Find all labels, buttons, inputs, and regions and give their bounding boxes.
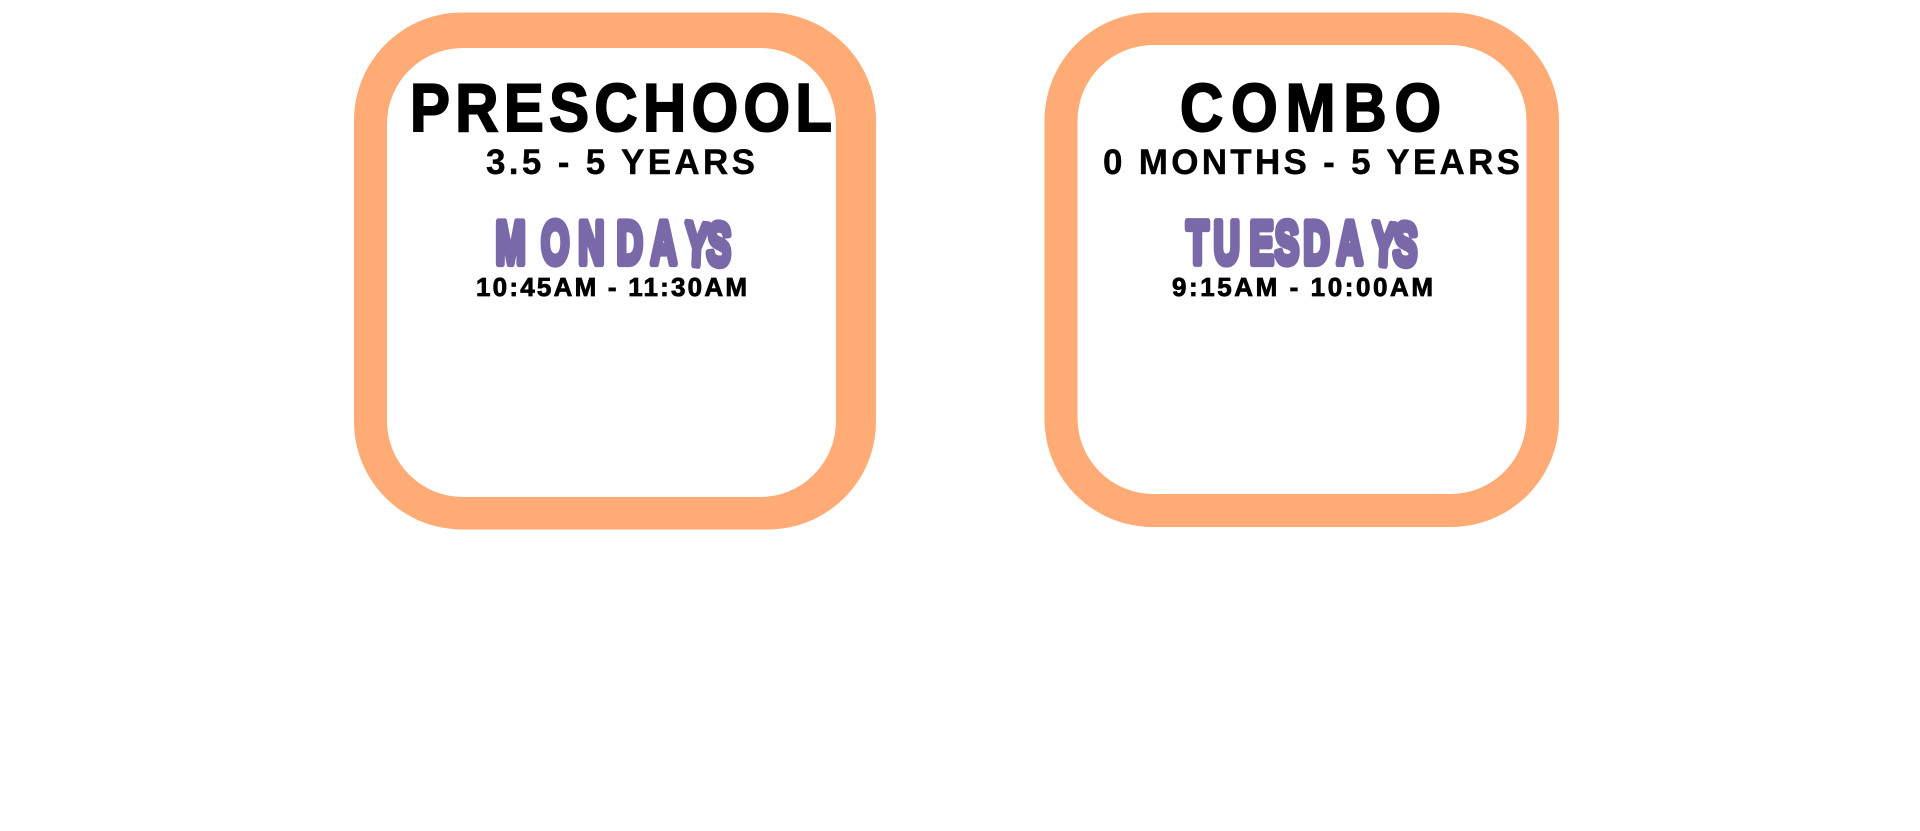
day: Tuesdays: TUESDAYS xyxy=(1187,210,1419,280)
age range: combo: 0 MONTHS - 5 YEARS xyxy=(1103,143,1520,182)
panel: preschool xyxy=(354,12,876,530)
time: Mondays: 10:45AM - 11:30AM xyxy=(476,272,747,302)
day: Mondays: MONDAYS xyxy=(496,210,732,280)
preschool frame xyxy=(354,12,876,530)
heading: combo: COMBO xyxy=(1180,69,1441,146)
age range: preschool: 3.5 - 5 YEARS xyxy=(486,143,755,182)
combo frame xyxy=(1044,12,1559,527)
panel: combo xyxy=(1044,12,1559,527)
heading: preschool: PRESCHOOL xyxy=(410,69,832,146)
time: Tuesdays: 9:15AM - 10:00AM xyxy=(1172,272,1433,302)
